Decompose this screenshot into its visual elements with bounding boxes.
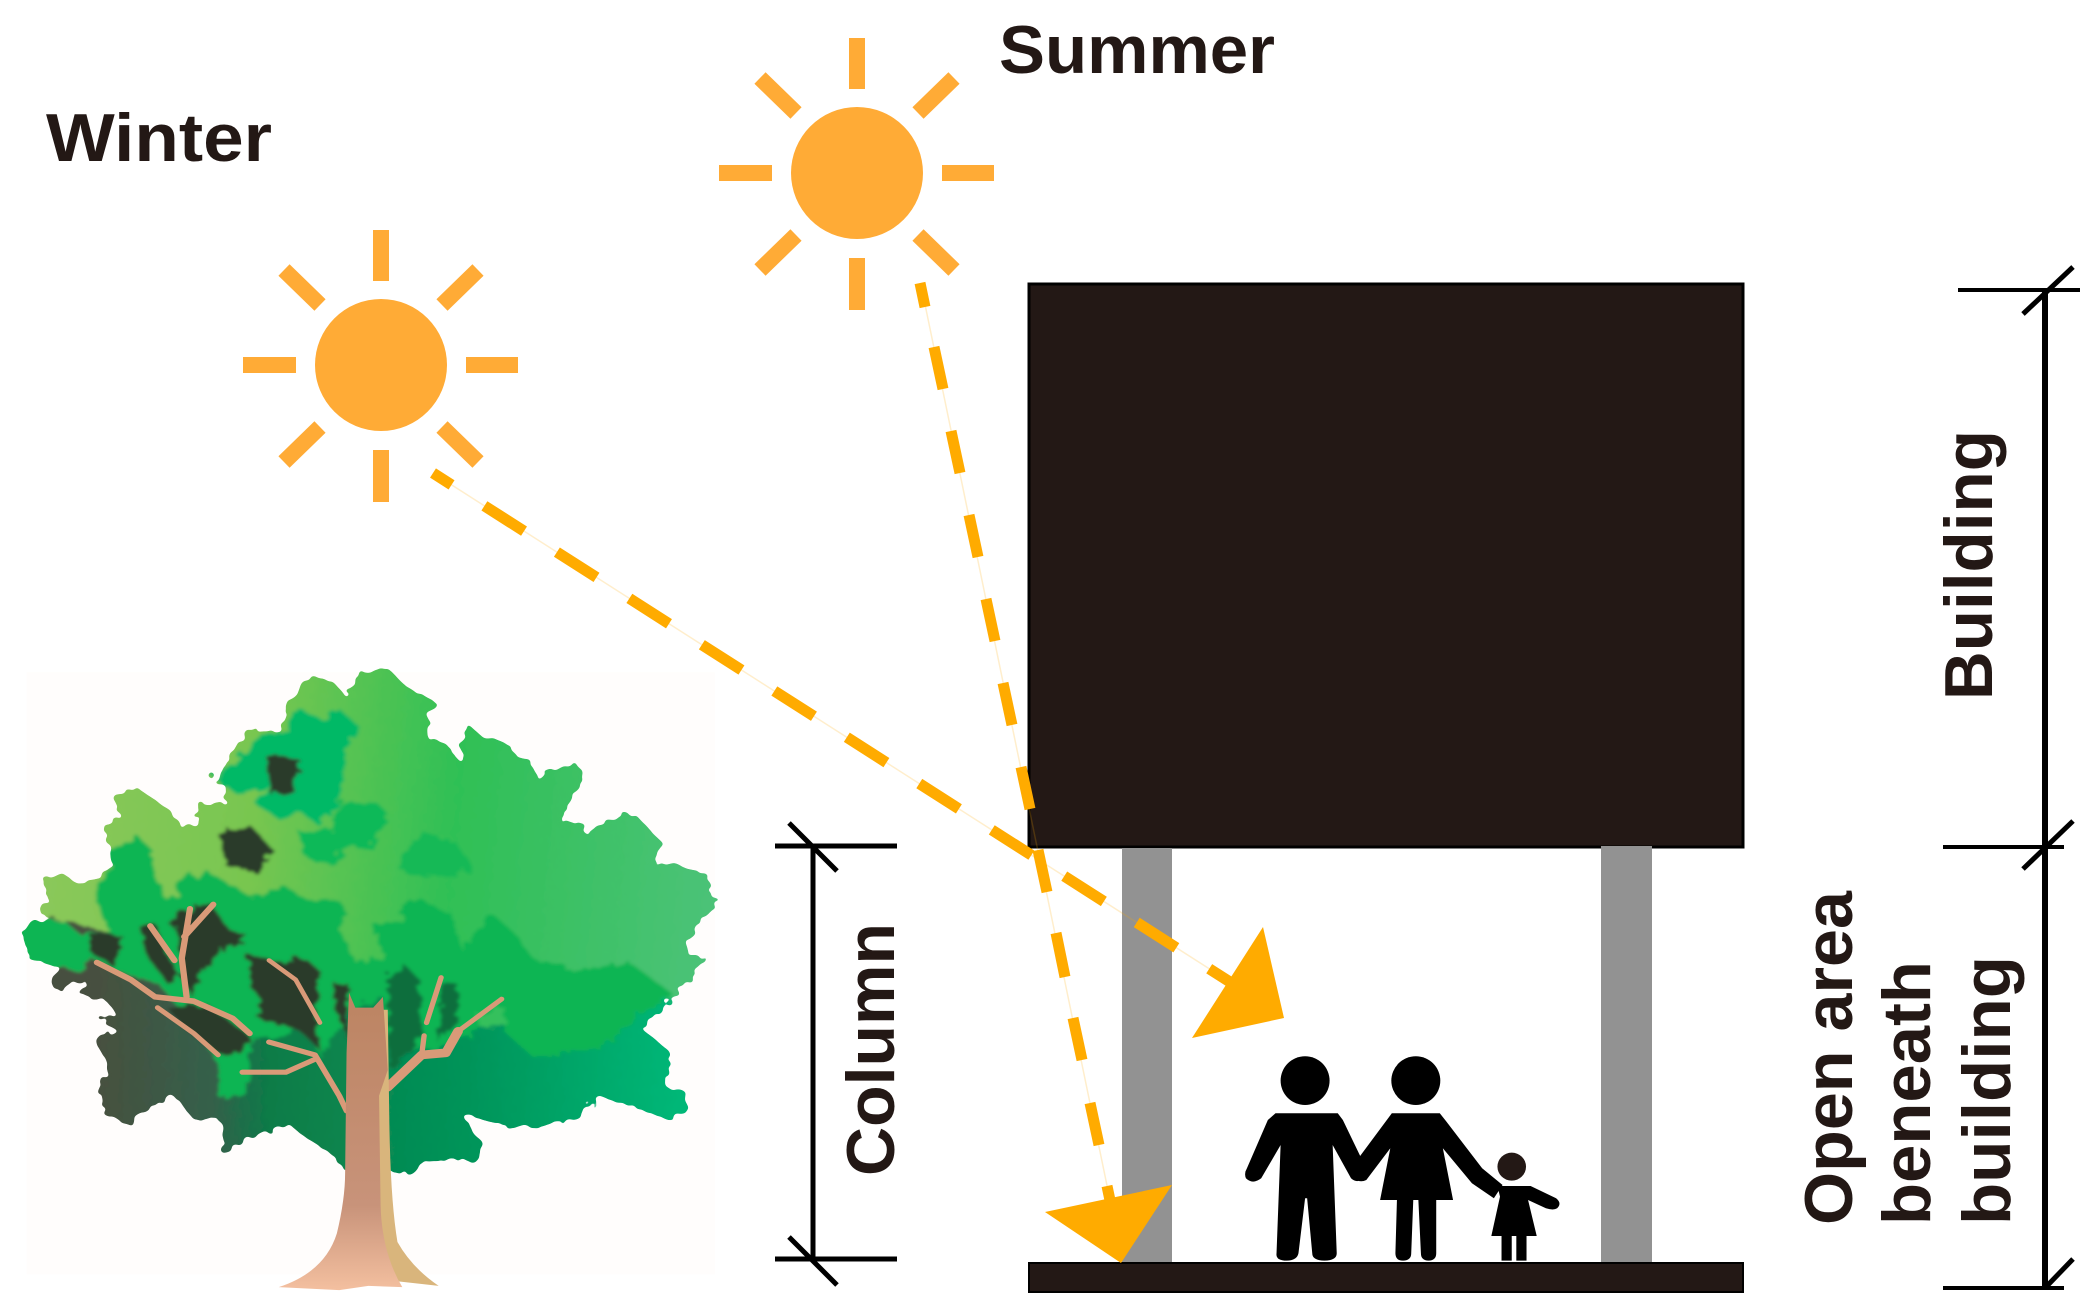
dark gaps in canopy (90, 754, 349, 1057)
tree trunk (279, 993, 439, 1290)
label: Column: Column (833, 923, 909, 1176)
dimension: column height (775, 823, 897, 1285)
dimension: building and open area heights (1943, 267, 2080, 1288)
right column (1601, 846, 1652, 1262)
tree branches (97, 904, 502, 1111)
arrow: summer sun ray (920, 283, 1172, 1263)
label: Winter: Winter (46, 100, 272, 176)
upper light foliage (41, 668, 722, 1027)
arrow: winter sun ray (433, 473, 1284, 1038)
label: Summer: Summer (999, 12, 1275, 88)
front canopy foliage (22, 834, 674, 1096)
label: Open area beneath building: building (1949, 956, 2025, 1225)
ground slab (1029, 1263, 1743, 1292)
label: Open area beneath building: beneath (1869, 961, 1945, 1225)
family silhouettes (1245, 1056, 1559, 1261)
tree illustration (22, 668, 722, 1290)
icon: winter sun (243, 230, 518, 502)
light leaf patches (298, 801, 390, 866)
building block (1029, 284, 1743, 847)
upper-left leaf cluster (213, 707, 361, 825)
label: Open area beneath building: Open area (1791, 890, 1867, 1225)
icon: summer sun (719, 38, 994, 310)
label: Open area beneath building (1791, 890, 2025, 1225)
left column (1122, 848, 1172, 1262)
back foliage (29, 898, 686, 1173)
label: Building: Building (1931, 430, 2007, 700)
figure: woman (1355, 1056, 1503, 1261)
figure: child (1491, 1153, 1559, 1261)
figure: man (1245, 1056, 1365, 1261)
